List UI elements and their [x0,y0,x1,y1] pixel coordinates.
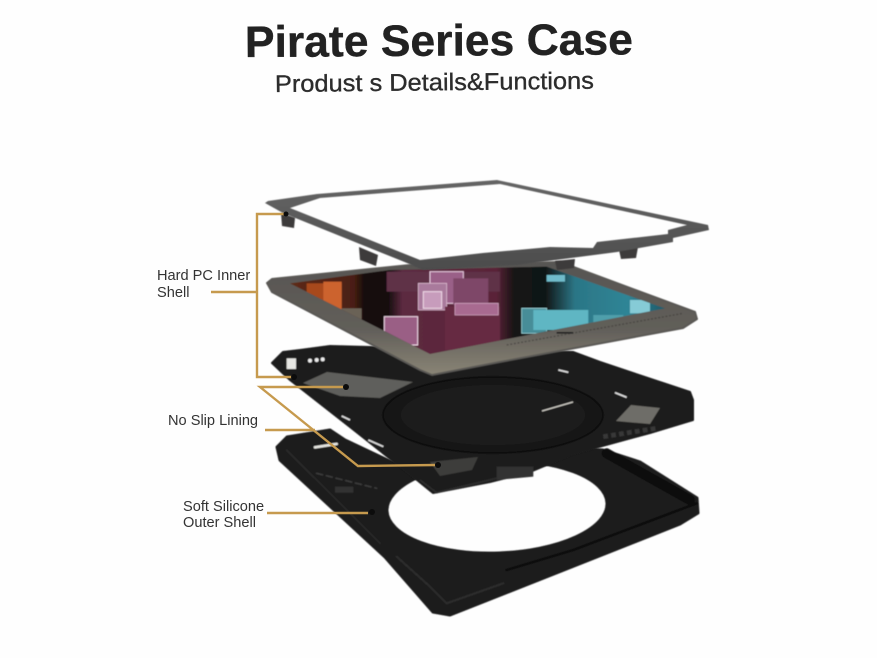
label: hard PC inner shell: Hard PC Inner [157,268,250,284]
callout dots [284,212,441,515]
no slip pads [303,372,413,398]
case details [287,357,657,493]
subtitle: Produst s Details&Functions [275,68,594,98]
leader: soft silicone outer shell [267,512,368,514]
top layer: tablet [267,262,697,375]
title: Pirate Series Case [245,15,633,67]
leader: hard PC inner shell [211,214,293,377]
shell highlights [287,444,697,603]
label: no slip lining: No Slip Lining [168,413,258,429]
rotating ring [383,377,603,453]
bottom layer: soft silicone outer shell [277,430,698,615]
frame clips [281,213,638,270]
middle layer: hard inner case with rotating ring [272,346,693,493]
label: soft silicone outer shell: Soft Silicone [183,499,264,515]
callout leader lines [211,214,435,513]
label: hard PC inner shell: Shell [157,285,189,301]
top layer: hard PC inner frame [265,180,709,270]
leader: no slip lining [260,387,435,466]
label: soft silicone outer shell: Outer Shell [183,515,256,531]
